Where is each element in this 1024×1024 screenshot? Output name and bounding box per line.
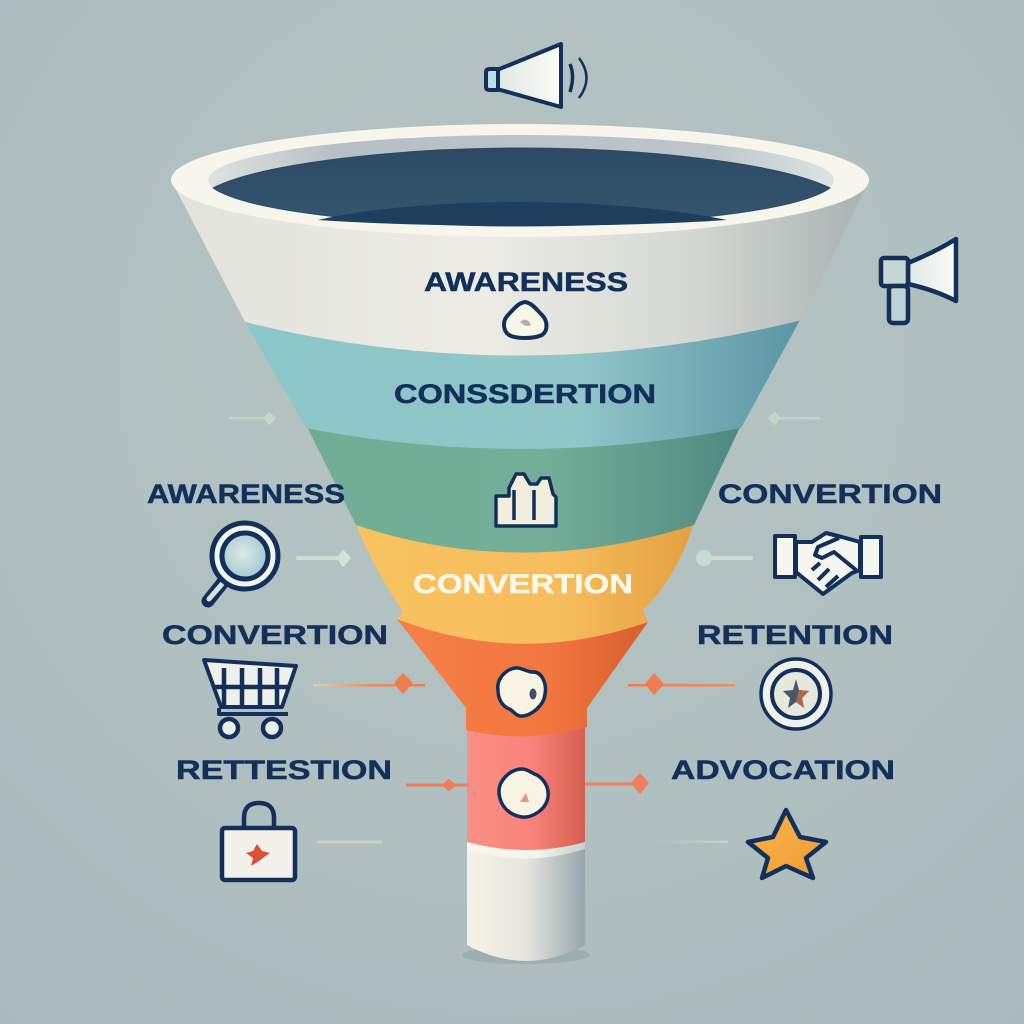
connector: mid left [296, 551, 350, 566]
connector: orange right [628, 675, 735, 693]
heading: conversion in funnel: CONVERTION [413, 569, 633, 599]
icon: badge [761, 659, 831, 729]
icon: orange blob [498, 668, 545, 716]
heading: awareness in funnel: AWARENESS [424, 267, 628, 297]
label: conversion left: CONVERTION [162, 620, 388, 650]
connector: upper left [229, 413, 275, 424]
label: awareness left: AWARENESS [147, 479, 345, 509]
funnel [171, 124, 869, 964]
icon: handshake [775, 533, 881, 594]
funnel tier: green [306, 425, 741, 552]
icon: bag lock [222, 803, 295, 880]
connector: coral right [585, 775, 647, 792]
icon: stem blob [499, 769, 548, 817]
icon: building chart [496, 474, 556, 526]
funnel tier: retention stem [467, 715, 585, 850]
funnel tier: consideration teal [245, 320, 800, 449]
cylinder base [462, 842, 590, 964]
heading: consideration: CONSSDERTION [394, 379, 656, 409]
label: retention left: RETTESTION [176, 755, 392, 785]
icon: star [748, 810, 826, 878]
icon: top megaphone [486, 44, 586, 107]
connector: coral left [406, 780, 468, 790]
connector: upper right [769, 413, 820, 424]
icon: right megaphone [881, 239, 956, 323]
funnel rim [171, 124, 869, 237]
label: conversion right: CONVERTION [718, 479, 942, 509]
connector: mid right [696, 550, 753, 566]
icon: magnifier [208, 523, 278, 601]
label: retention right: RETENTION [697, 620, 893, 650]
connector: faint right [650, 840, 728, 843]
funnel tier: orange [397, 619, 648, 736]
icon: awareness droplet [504, 302, 546, 338]
funnel tier: conversion yellow [353, 514, 696, 644]
connector: orange left [313, 675, 425, 692]
label: advocation: ADVOCATION [671, 755, 895, 785]
connector: faint left [317, 840, 382, 844]
icon: cart [204, 660, 296, 737]
funnel tier: awareness white [171, 180, 869, 356]
